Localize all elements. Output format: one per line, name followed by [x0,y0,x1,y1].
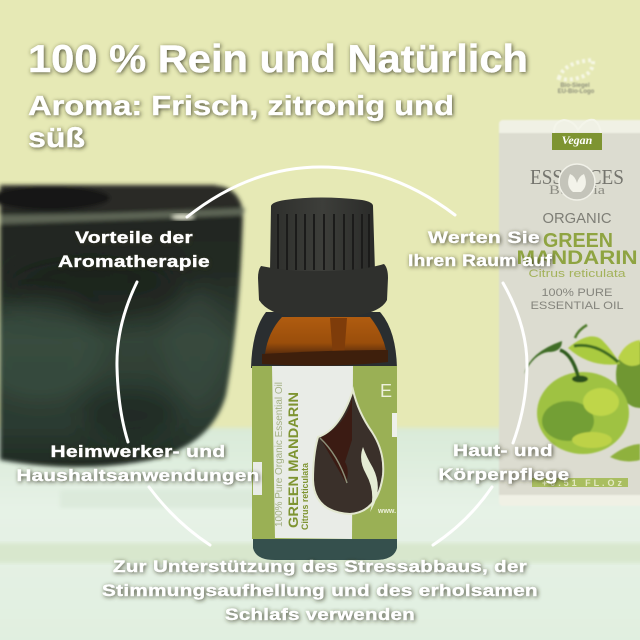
box product name: ORGANIC [542,210,612,227]
product box: Bulgaria [549,182,605,197]
product box: Citrus reticulata [528,268,627,280]
subtitle [28,90,454,153]
subtitle: süß [28,122,85,153]
label: Haut- und Körperpflege: Körperpflege [438,465,570,484]
glass shoulder [251,312,397,368]
illustration: green mandarin [524,325,640,461]
bottle base [253,535,397,560]
bottle body [252,366,397,539]
label: Heimwerker- und Haushaltsanwendungen [16,442,260,485]
label: Vorteile der Aromatherapie: Aromatherapie [58,252,210,271]
box descriptor: 100% PURE [542,287,612,299]
essential oil bottle: Citrus reticulata [300,462,310,530]
bottle side text: 100% Pure Organic Essential Oil [274,382,285,527]
product box: ESSENTIAL OIL [530,300,624,312]
product box [499,120,640,506]
label: Werten Sie Ihren Raum auf: Werten Sie [428,228,540,247]
title: 100 % Rein und Natürlich [28,38,528,81]
bottom usage note: Schlafs verwenden [225,605,415,624]
label: Haut- und Körperpflege [438,441,570,484]
box brand text: ESSENCES [530,165,624,189]
bottle collar [258,264,388,317]
label: Vorteile der Aromatherapie [58,228,210,271]
vegan badge [552,120,602,150]
label: Werten Sie Ihren Raum auf [408,228,552,270]
label: Vorteile der Aromatherapie: Vorteile der [75,228,193,247]
essential oil bottle: E [380,381,392,401]
subtitle: Aroma: Frisch, zitronig und [28,90,454,121]
label: Heimwerker- und Haushaltsanwendungen: Haushaltsanwendungen [16,466,260,485]
essential oil bottle: GREEN MANDARIN [285,392,301,528]
label: Haut- und Körperpflege: Haut- und [453,441,553,460]
product box: MANDARIN [516,248,638,269]
bottom usage note [102,557,538,624]
label: Werten Sie Ihren Raum auf: Ihren Raum auf [408,251,552,270]
EU organic logo [558,60,595,95]
dark bowl [0,185,245,467]
bottom usage note: Stimmungsaufhellung und des erholsamen [102,581,538,600]
bottom usage note: Zur Unterstützung des Stressabbaus, der [113,557,527,576]
essential oil bottle [251,198,397,560]
essential oil bottle: www. [377,508,396,515]
box size strip [532,478,628,487]
vegan badge: Vegan [562,133,593,147]
product box: GREEN [543,230,613,252]
EU organic logo: EU-Bio-Logo [558,89,595,95]
no animal testing badge [559,164,595,200]
bottle cap [270,198,375,272]
drop emblem [313,390,383,514]
label: Heimwerker- und Haushaltsanwendungen: Heimwerker- und [50,442,226,461]
EU organic logo: Bio-Siegel [560,83,590,89]
white label [272,366,353,539]
circle diagram arcs [117,167,527,545]
product box: +0.51 FL.Oz [542,478,622,488]
